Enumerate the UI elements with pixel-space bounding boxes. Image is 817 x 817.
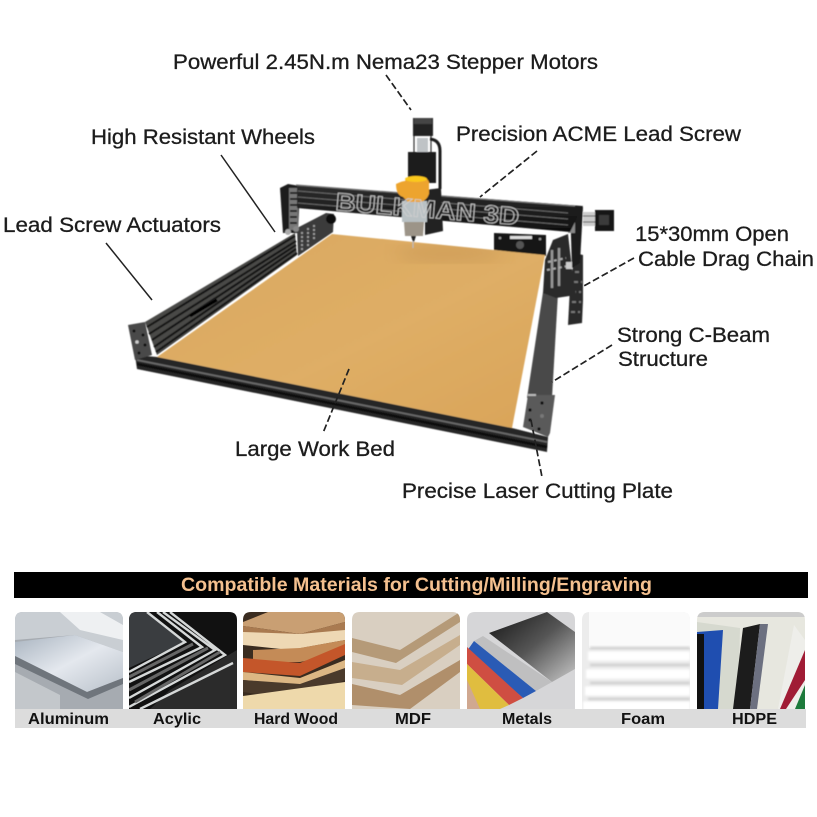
rear plate <box>494 233 546 256</box>
label: drag chain: 15*30mm Open <box>635 223 789 246</box>
material: aluminum <box>15 612 123 728</box>
yellow router <box>396 176 429 202</box>
label: C-beam <box>617 324 770 371</box>
brand text on beam: BULKMAN 3D <box>335 188 520 231</box>
caption: Metals <box>502 711 552 728</box>
label: C-beam: Strong C-Beam <box>617 324 770 347</box>
label: stepper motors: Powerful 2.45N.m Nema23 Stepper Motors <box>173 51 598 74</box>
gantry left upright <box>280 184 300 233</box>
leader: lead screw <box>480 151 537 197</box>
label: drag chain: Cable Drag Chain <box>638 248 814 271</box>
material label strip <box>15 709 806 728</box>
router bit <box>411 236 416 242</box>
caption: MDF <box>395 711 431 728</box>
front rail <box>135 355 548 452</box>
right corner plate <box>523 394 555 437</box>
caption: Foam <box>621 711 665 728</box>
left Y carriage <box>285 213 336 256</box>
material: foam <box>582 612 690 728</box>
left rail <box>145 233 297 355</box>
leader: actuators <box>106 243 152 300</box>
gantry right upright <box>568 206 583 268</box>
caption: Acylic <box>153 711 201 728</box>
spindle assembly <box>396 118 443 248</box>
leader: work bed <box>323 369 349 433</box>
clear router housing <box>402 201 427 222</box>
gantry beam <box>296 185 583 232</box>
leader: cutting plate <box>531 420 542 477</box>
cable <box>430 139 440 189</box>
Z stepper motor <box>413 118 433 136</box>
caption: Aluminum <box>28 711 109 728</box>
label: wheels: High Resistant Wheels <box>91 126 315 149</box>
drag chain <box>568 253 583 325</box>
material: metals <box>467 612 575 728</box>
materials header bar: Compatible Materials for Cutting/Milling/Engraving <box>181 575 652 596</box>
work bed <box>157 234 545 428</box>
carriage plate <box>425 188 443 235</box>
left corner plate <box>128 322 152 360</box>
right carriage cluster <box>543 234 576 298</box>
Z coupler <box>414 136 431 152</box>
Z axis body <box>408 152 436 183</box>
leader: wheels <box>221 155 275 232</box>
leader: C-beam <box>552 345 612 382</box>
Y stepper motor <box>583 210 614 231</box>
leader: stepper motors <box>386 75 411 110</box>
router collet <box>404 222 424 236</box>
material: MDF <box>352 612 460 728</box>
caption: Hard Wood <box>254 711 338 728</box>
material: hard wood <box>243 612 345 728</box>
label: lead screw: Precision ACME Lead Screw <box>456 123 742 146</box>
material: acrylic <box>129 612 237 728</box>
leader: drag chain <box>582 258 634 287</box>
label: work bed: Large Work Bed <box>235 438 395 461</box>
CNC machine illustration <box>128 118 614 452</box>
label: drag chain <box>635 223 814 271</box>
material: HDPE <box>697 612 805 728</box>
label: C-beam: Structure <box>618 348 708 371</box>
label: actuators: Lead Screw Actuators <box>3 214 221 237</box>
caption: HDPE <box>732 711 777 728</box>
right rail <box>527 292 558 398</box>
label: cutting plate: Precise Laser Cutting Plate <box>402 480 673 503</box>
materials header bar <box>14 572 808 598</box>
